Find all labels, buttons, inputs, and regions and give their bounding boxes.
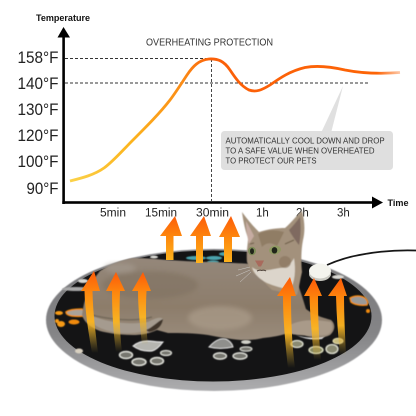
cat head: [242, 211, 304, 295]
time tick labels: 5min: [100, 208, 126, 220]
time tick labels: [100, 208, 350, 220]
mat control switch: [309, 264, 331, 281]
temperature curve: [70, 59, 400, 181]
time tick labels: 2h: [296, 208, 309, 220]
upper arrows: [160, 216, 182, 260]
cat body and tail: [82, 258, 334, 340]
time tick labels: 1h: [256, 208, 269, 220]
callout pointer and box: AUTOMATICALLY COOL DOWN AND DROP: [226, 136, 385, 146]
cat: [82, 211, 334, 340]
y axis title: Temperature: [36, 13, 90, 23]
cat face: [236, 245, 282, 282]
temperature tick labels: 120°F: [18, 126, 58, 145]
callout pointer and box: [221, 86, 393, 170]
temperature tick labels: 140°F: [18, 74, 58, 93]
temperature tick labels: 130°F: [18, 100, 58, 119]
x axis title: Time: [388, 198, 408, 209]
lower arrows: [81, 271, 100, 353]
paw prints on mat: [55, 252, 370, 366]
time tick labels: 30min: [196, 208, 229, 220]
chart heading: OVERHEATING PROTECTION: [146, 38, 273, 48]
time tick labels: 3h: [337, 208, 350, 220]
temperature tick labels: 100°F: [18, 152, 58, 171]
temperature tick labels: [18, 48, 58, 198]
callout pointer and box: TO PROTECT OUR PETS: [226, 156, 317, 166]
guide lines: [65, 58, 368, 201]
axes: [58, 27, 383, 208]
heated mat: [46, 249, 382, 391]
temperature tick labels: 158°F: [18, 48, 58, 67]
callout pointer and box: TO A SAFE VALUE WHEN OVERHEATED: [226, 146, 374, 156]
heat arrows rising from the mat: [81, 216, 347, 368]
power cord: [327, 250, 416, 265]
time tick labels: 15min: [145, 208, 177, 220]
temperature tick labels: 90°F: [26, 179, 58, 198]
